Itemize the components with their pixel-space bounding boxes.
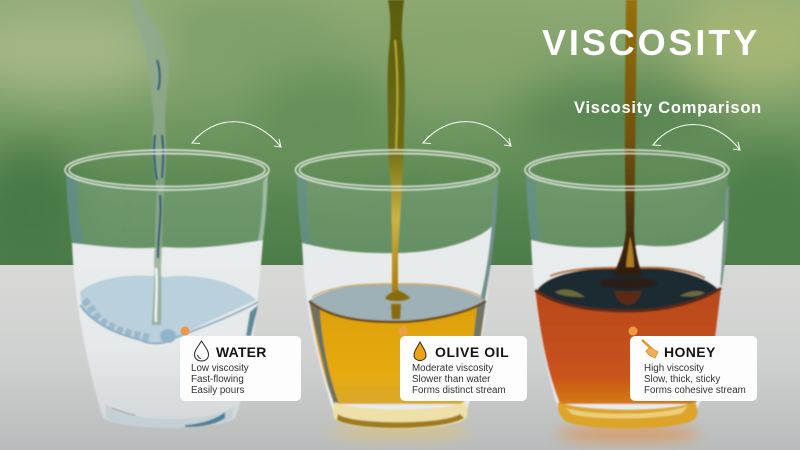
background: blurred green foliage (0, 0, 800, 270)
description: honey: Forms cohesive stream (644, 385, 746, 396)
title: VISCOSITY (542, 22, 760, 63)
glass: water (66, 172, 268, 428)
icon: oil drop (414, 342, 426, 360)
subtitle: Viscosity Comparison (574, 99, 762, 117)
pour stream: water (128, 0, 169, 325)
table glow: olive oil (328, 425, 472, 439)
pour stream: olive oil (388, 0, 405, 292)
description: water: Low viscosity (191, 363, 249, 374)
description: olive oil: Moderate viscosity (412, 363, 493, 374)
heading: olive oil: OLIVE OIL (435, 344, 509, 360)
card: honey (630, 336, 757, 401)
description: olive oil: Forms distinct stream (412, 385, 506, 396)
description: olive oil: Slower than water (412, 374, 491, 385)
card: olive oil (400, 336, 527, 401)
glass rims (65, 150, 729, 190)
icon: honey dipper (642, 340, 658, 358)
description: honey: High viscosity (644, 363, 704, 374)
table glow: honey (556, 427, 700, 441)
card: water (180, 336, 301, 401)
arrow: water (192, 122, 281, 147)
description: water: Fast-flowing (191, 374, 244, 385)
marker dot: water (180, 326, 190, 336)
oil ripple where stream lands (385, 290, 410, 319)
glass: olive oil (297, 172, 498, 428)
marker dot: olive oil (398, 326, 408, 336)
glass: honey (526, 172, 729, 428)
heading: water: WATER (216, 344, 267, 360)
heading: honey: HONEY (664, 344, 716, 360)
marker dot: honey (628, 326, 638, 336)
arrow: honey (653, 125, 740, 150)
description: honey: Slow, thick, sticky (644, 374, 720, 385)
description: water: Easily pours (191, 385, 244, 396)
icon: water drop (194, 341, 208, 361)
pour stream: honey (600, 0, 658, 305)
arrow: olive oil (423, 122, 511, 146)
table surface (0, 265, 800, 450)
